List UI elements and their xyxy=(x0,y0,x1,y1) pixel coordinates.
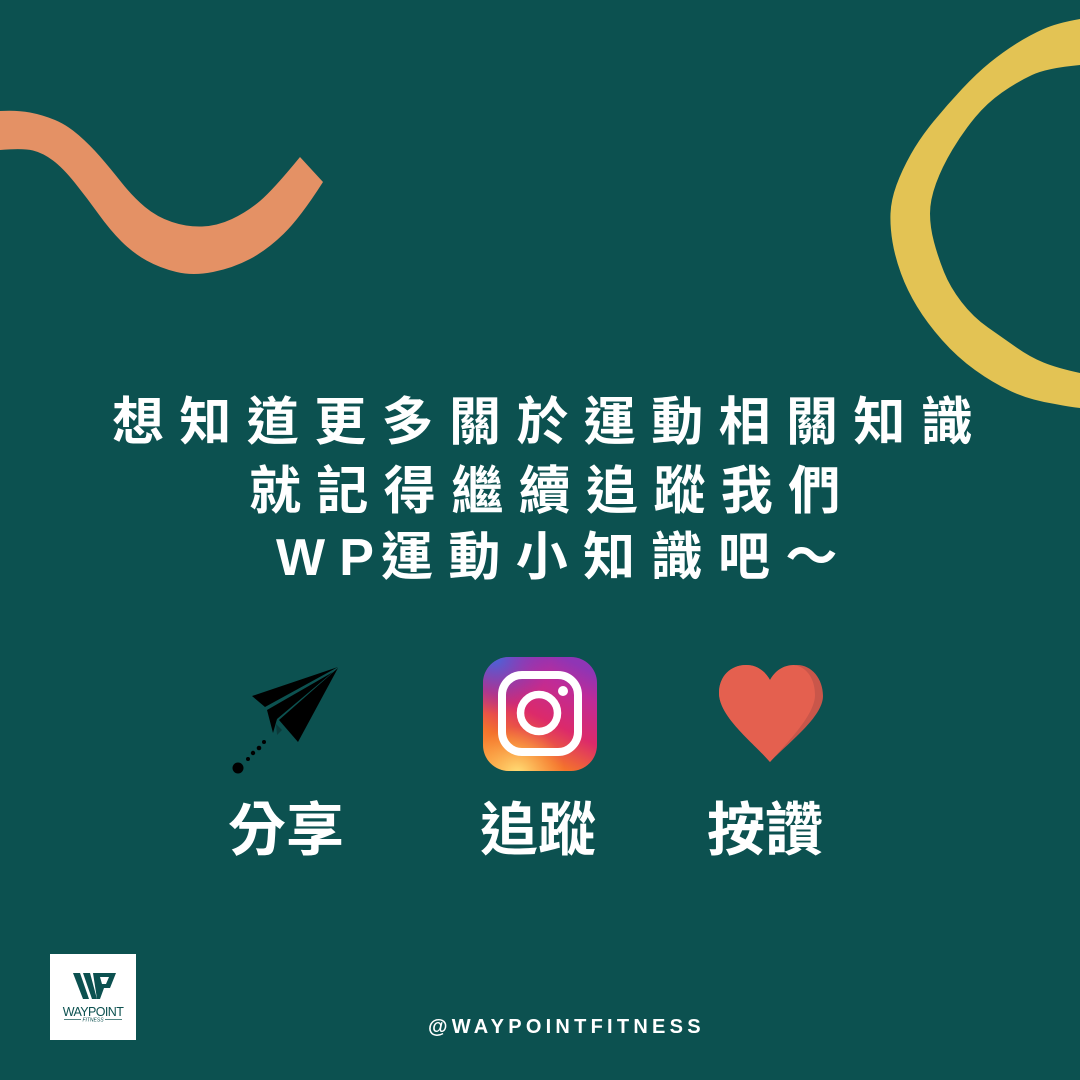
icon: instagram xyxy=(483,657,597,771)
heading line 1: 想知道更多關於運動相關知識 xyxy=(112,394,988,452)
decorative yellow ring xyxy=(890,19,1080,408)
logo subtitle: FITNESS xyxy=(82,1018,104,1024)
logo wordmark: WAYPOINT xyxy=(63,1005,124,1019)
label: follow: 追蹤 xyxy=(480,798,596,863)
decorative orange wave xyxy=(0,110,323,274)
heading line 2: 就記得繼續追蹤我們 xyxy=(249,463,856,521)
label: share: 分享 xyxy=(228,798,344,863)
label: like: 按讚 xyxy=(707,798,823,863)
logo xyxy=(50,954,136,1040)
heading xyxy=(112,394,988,587)
heading line 3: WP運動小知識吧～ xyxy=(276,529,853,587)
icon: paper plane xyxy=(232,667,338,774)
icon: heart xyxy=(719,665,823,762)
social handle: @WAYPOINTFITNESS xyxy=(428,1016,705,1038)
